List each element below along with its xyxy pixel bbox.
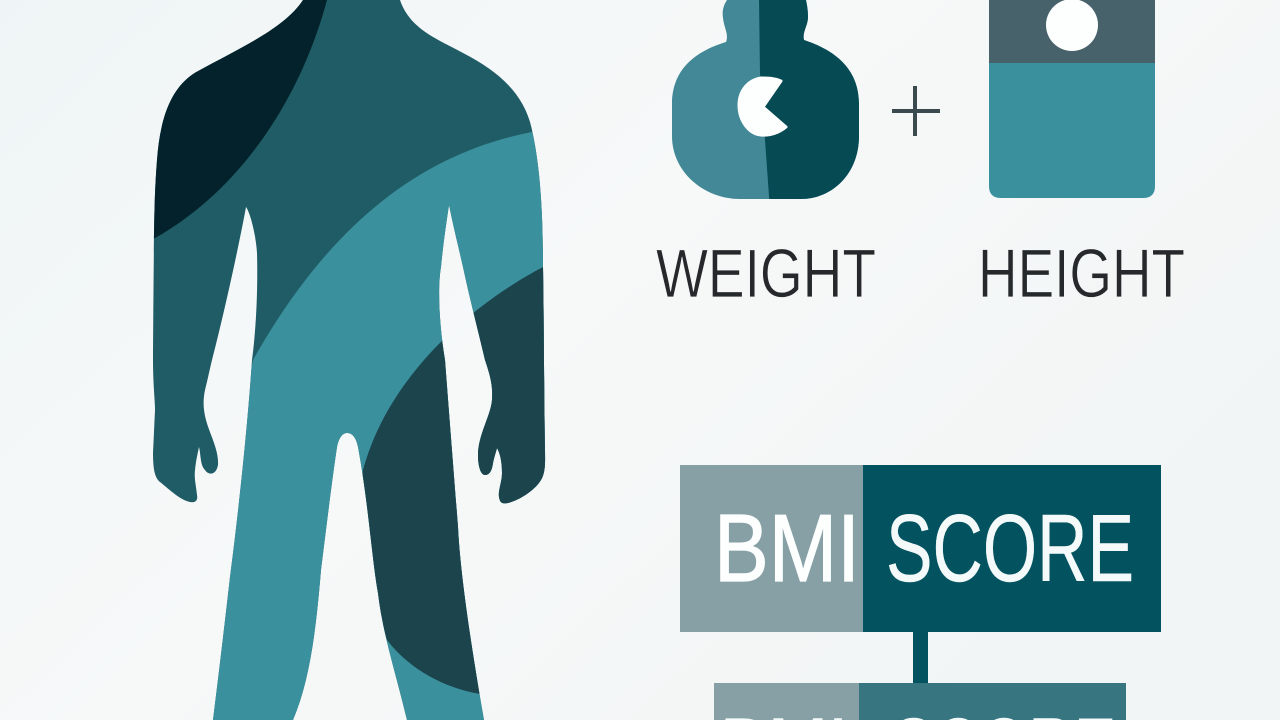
- plus sign: [892, 86, 940, 136]
- main box right panel: [863, 465, 1161, 632]
- weight dial: [739, 78, 786, 135]
- human body figure: [130, 0, 560, 720]
- height icon lower panel: [989, 63, 1155, 199]
- weight left half: [672, 0, 859, 199]
- light teal diagonal region: [213, 132, 546, 720]
- main box SCORE text: SCORE: [886, 495, 1134, 602]
- body base mid-teal region: [140, 0, 560, 720]
- label: weight: WEIGHT: [656, 235, 876, 312]
- connector: [913, 632, 928, 684]
- BMI score lower box: [714, 683, 1126, 720]
- height icon top band: [989, 0, 1155, 63]
- dark shoulder region: [154, 0, 327, 239]
- icon: height: [989, 0, 1155, 199]
- icon: weight: [672, 0, 859, 199]
- dark hip and right arm region: [362, 267, 546, 694]
- lower box left panel: [714, 683, 859, 720]
- main box left panel: [680, 465, 863, 632]
- BMI score main box: [680, 465, 1161, 632]
- main box BMI text: BMI: [714, 495, 860, 602]
- weight right half: [759, 0, 859, 199]
- label: height: HEIGHT: [978, 235, 1185, 312]
- height icon circle: [1046, 0, 1098, 51]
- lower box right panel: [859, 683, 1126, 720]
